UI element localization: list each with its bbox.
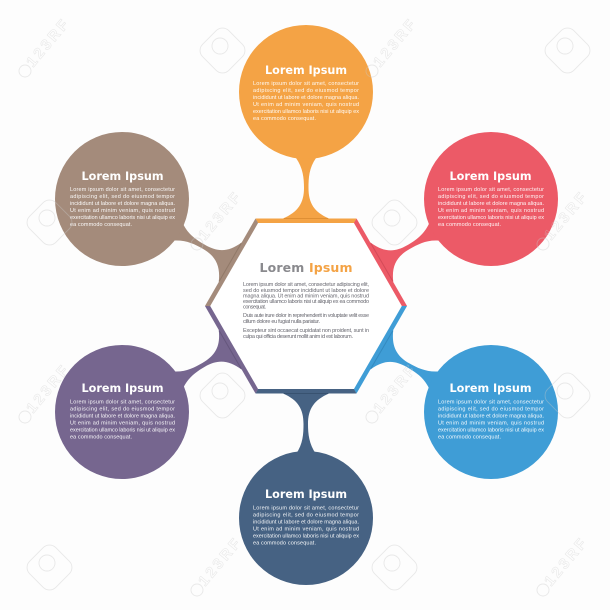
panel: brown upper left: incididunt ut labore et dolore magna aliqua. (70, 201, 175, 207)
panel: brown upper left: Lorem Ipsum (82, 170, 164, 183)
center body text: Duis aute irure dolor in reprehenderit in voluptate velit esse (243, 313, 369, 319)
center heading: Lorem Ipsum (260, 260, 352, 275)
watermark pattern: 123RF (541, 190, 590, 244)
panel: purple lower left: exercitation ullamco laboris nisi ut aliquip ex (70, 428, 175, 434)
panel: purple lower left (55, 304, 259, 479)
watermark pattern: 123RF (370, 17, 419, 71)
panel: blue lower right: exercitation ullamco laboris nisi ut aliquip ex (438, 428, 544, 434)
panel: purple lower left: Lorem ipsum dolor sit amet, consectetur (70, 400, 175, 406)
watermark pattern: 123RF (23, 17, 72, 71)
panel: navy bottom: adipiscing elit, sed do eiusmod tempor (253, 512, 359, 518)
panel: purple lower left: incididunt ut labore et dolore magna aliqua. (70, 414, 175, 420)
hexagon center panel (206, 220, 406, 392)
panel: blue lower right (353, 304, 558, 479)
panel: purple lower left: Lorem Ipsum (82, 382, 164, 395)
panel: orange top: adipiscing elit, sed do eiusmod tempor (253, 88, 359, 94)
panel: blue lower right: Lorem ipsum dolor sit amet, consectetur (438, 400, 544, 406)
panel: orange top: Ut enim ad minim veniam, quis nostrud (253, 102, 359, 108)
center body text: sed do eiusmod tempor incididunt ut labore et dolore (243, 288, 369, 294)
panel: orange top: exercitation ullamco laboris nisi ut aliquip ex (253, 109, 359, 115)
panel: red upper right: Lorem ipsum dolor sit amet, consectetur (438, 187, 544, 193)
panel: navy bottom: exercitation ullamco laboris nisi ut aliquip ex (253, 534, 359, 540)
center body text: Excepteur sint occaecat cupidatat non proident, sunt in (243, 328, 369, 334)
watermark pattern: 123RF (370, 363, 419, 417)
center body text: culpa qui officia deserunt mollit anim id est laborum. (243, 334, 353, 340)
center body text: consequat. (243, 304, 266, 310)
panel: brown upper left: adipiscing elit, sed do eiusmod tempor (70, 194, 175, 200)
center body text: exercitation ullamco laboris nisi ut aliquip ex ea commodo (243, 299, 369, 305)
panel: blue lower right: adipiscing elit, sed do eiusmod tempor (438, 406, 544, 412)
panel: navy bottom (239, 389, 373, 585)
panel: red upper right: Ut enim ad minim veniam, quis nostrud (438, 208, 544, 214)
panel: purple lower left: ea commodo consequat. (70, 434, 132, 440)
panel: brown upper left: Lorem ipsum dolor sit amet, consectetur (70, 187, 175, 193)
panel: red upper right: adipiscing elit, sed do eiusmod tempor (438, 194, 544, 200)
panel: navy bottom: Lorem ipsum dolor sit amet, consectetur (253, 506, 359, 512)
panel: blue lower right: incididunt ut labore et dolore magna aliqua. (438, 414, 544, 420)
panel: orange top: ea commodo consequat. (253, 116, 316, 122)
panel: red upper right: exercitation ullamco laboris nisi ut aliquip ex (438, 215, 544, 221)
panel: blue lower right: Lorem Ipsum (450, 382, 532, 395)
panel: red upper right: ea commodo consequat. (438, 222, 501, 228)
panel: purple lower left: Ut enim ad minim veniam, quis nostrud (70, 420, 175, 426)
panel: red upper right: Lorem Ipsum (450, 170, 532, 183)
panel: orange top: incididunt ut labore et dolore magna aliqua. (253, 95, 359, 101)
center body text: magna aliqua. Ut enim ad minim veniam, quis nostrud (243, 294, 369, 300)
panel: brown upper left: exercitation ullamco laboris nisi ut aliquip ex (70, 215, 175, 221)
watermark pattern: 123RF (23, 363, 72, 417)
panel: brown upper left: Ut enim ad minim veniam, quis nostrud (70, 208, 175, 214)
panel: navy bottom: Lorem Ipsum (265, 488, 347, 501)
panel: purple lower left: adipiscing elit, sed do eiusmod tempor (70, 406, 175, 412)
center body text: cillum dolore eu fugiat nulla pariatur. (243, 319, 320, 325)
panel: brown upper left: ea commodo consequat. (70, 222, 132, 228)
panel: orange top: Lorem ipsum dolor sit amet, consectetur (253, 81, 359, 87)
panel: orange top: Lorem Ipsum (265, 64, 347, 77)
panel: brown upper left (55, 132, 259, 308)
panel: navy bottom: Ut enim ad minim veniam, quis nostrud (253, 526, 359, 532)
watermark pattern: 123RF (195, 190, 244, 244)
watermark pattern: 123RF (195, 536, 244, 590)
panel: navy bottom: incididunt ut labore et dolore magna aliqua. (253, 520, 359, 526)
panel: orange top (239, 25, 373, 223)
center body text (243, 282, 369, 340)
center body text: Lorem ipsum dolor sit amet, consectetur adipiscing elit, (243, 282, 369, 288)
panel: blue lower right: ea commodo consequat. (438, 434, 501, 440)
panel: red upper right: incididunt ut labore et dolore magna aliqua. (438, 201, 544, 207)
panel: blue lower right: Ut enim ad minim veniam, quis nostrud (438, 420, 544, 426)
panel: red upper right (353, 132, 558, 308)
panel: navy bottom: ea commodo consequat. (253, 540, 316, 546)
watermark pattern: 123RF (541, 536, 590, 590)
